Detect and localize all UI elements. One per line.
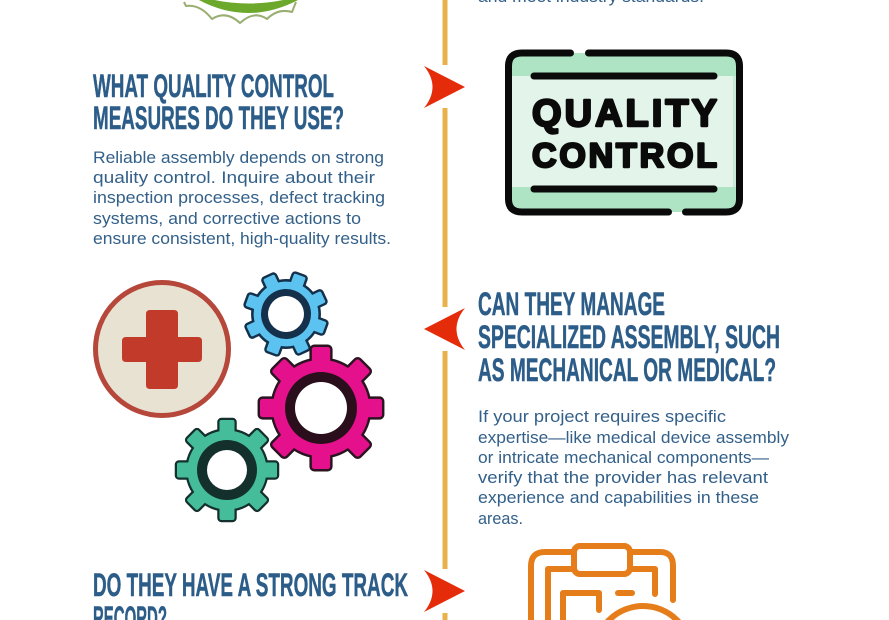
icon: blue gear — [233, 261, 339, 367]
heading: track record — [93, 567, 408, 620]
icon: green seal (cropped at top) — [184, 0, 300, 23]
text: specialized assembly body: If your project requires specific — [478, 408, 726, 426]
heading: specialized assembly — [478, 286, 780, 388]
text: specialized assembly body — [478, 408, 790, 528]
heading: quality control measures: MEASURES DO THEY USE? — [93, 100, 344, 136]
icon: magenta gear — [260, 347, 382, 469]
heading: track record: DO THEY HAVE A STRONG TRACK — [93, 567, 408, 603]
timeline vertical line — [442, 0, 448, 620]
text: quality control body: quality control. Inquire about their — [93, 169, 376, 187]
icon: medical cross badge — [96, 282, 228, 416]
heading: quality control measures: WHAT QUALITY CONTROL — [93, 68, 334, 104]
icon: quality control sign: CONTROL — [532, 137, 717, 175]
arrow: pointing right, track record — [424, 570, 465, 612]
icon: green gear — [177, 420, 277, 520]
heading: specialized assembly: CAN THEY MANAGE — [478, 286, 665, 322]
text: quality control body: ensure consistent, high-quality results. — [93, 230, 391, 248]
text: specialized assembly body: experience and capabilities in these — [478, 489, 759, 507]
text: quality control body — [93, 149, 391, 248]
icon: quality control sign: QUALITY — [532, 93, 717, 135]
arrow: pointing left, specialized assembly — [424, 308, 465, 350]
arrow: pointing right, quality control — [424, 66, 465, 108]
text: quality control body: Reliable assembly depends on strong — [93, 149, 384, 167]
text: specialized assembly body: expertise—like medical device assembly — [478, 429, 790, 447]
icon: quality control sign — [508, 53, 740, 212]
heading: quality control measures — [93, 68, 344, 136]
text: quality control body: inspection processes, defect tracking — [93, 189, 385, 207]
icon: orange clipboard with magnifier — [531, 546, 691, 620]
text: specialized assembly body: areas. — [478, 510, 523, 528]
text: quality control body: systems, and corrective actions to — [93, 210, 361, 228]
text: specialized assembly body: or intricate mechanical components— — [478, 449, 770, 467]
text: specialized assembly body: verify that the provider has relevant — [478, 469, 768, 487]
